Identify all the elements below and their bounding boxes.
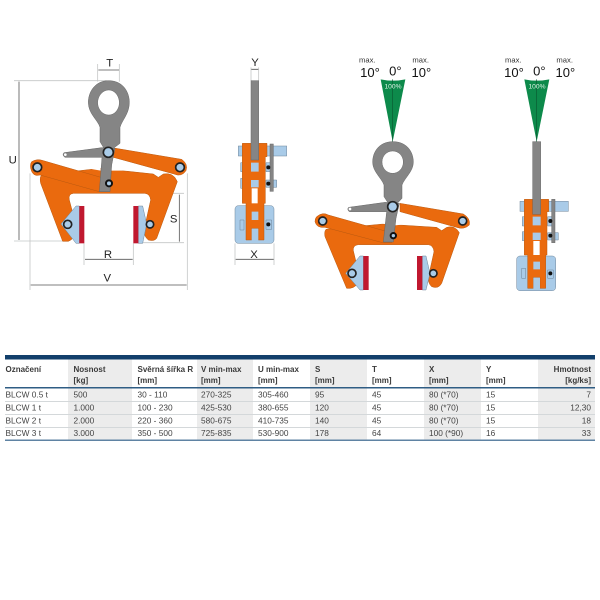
openings [533, 217, 541, 288]
row BLCW 1 t: 100 - 230 [138, 402, 173, 412]
gray bar [251, 81, 259, 160]
row BLCW 0.5 t: BLCW 0.5 t [6, 390, 49, 400]
row BLCW 1 t: 15 [486, 402, 496, 412]
row BLCW 3 t: 530-900 [258, 428, 289, 438]
row BLCW 1 t [6, 402, 591, 412]
row BLCW 3 t: 100 (*90) [429, 428, 463, 438]
text: 10 left: 10° [504, 65, 524, 80]
text: 10 right: 10° [412, 65, 431, 80]
row BLCW 2 t: 220 - 360 [138, 416, 173, 426]
row BLCW 3 t: 16 [486, 428, 496, 438]
dimension label R: R [104, 249, 112, 261]
dimension label T: T [106, 58, 113, 70]
table header: [mm] [201, 376, 221, 385]
row BLCW 2 t: 45 [372, 416, 382, 426]
dimension lines [235, 67, 274, 265]
row BLCW 0.5 t: 270-325 [201, 390, 232, 400]
row BLCW 2 t: 18 [582, 416, 591, 426]
row BLCW 0.5 t: 7 [586, 390, 591, 400]
row BLCW 0.5 t: 45 [372, 390, 382, 400]
orange plates [524, 199, 549, 288]
row BLCW 0.5 t: 95 [315, 390, 325, 400]
table header: S [315, 365, 321, 374]
table header: X [429, 365, 435, 374]
dimension label Y: Y [251, 57, 259, 69]
outer side plates [240, 163, 277, 230]
text: max right: max. [412, 55, 429, 64]
row BLCW 3 t: 33 [582, 428, 591, 438]
row BLCW 1 t: 120 [315, 402, 329, 412]
text: 10 left: 10° [360, 65, 380, 80]
table header: [kg] [74, 376, 88, 385]
orange jaw body [325, 224, 459, 288]
row BLCW 1 t: 1.000 [74, 402, 95, 412]
right clamp pad [133, 206, 154, 243]
row BLCW 1 t: BLCW 1 t [6, 402, 42, 412]
openings [251, 163, 259, 240]
gray arm [63, 148, 115, 192]
row BLCW 1 t: 12,30 [570, 402, 591, 412]
row separators [5, 402, 595, 428]
row BLCW 0.5 t: 305-460 [258, 390, 289, 400]
bolt [520, 201, 568, 211]
pivots [319, 202, 467, 238]
green angle wedge: 100% [384, 83, 402, 90]
white gaps [68, 155, 148, 171]
bolt heads [548, 219, 552, 275]
table header: Označení [6, 365, 42, 374]
row BLCW 3 t: 350 - 500 [138, 428, 173, 438]
dimension label U: U [9, 155, 17, 167]
text: 10 right: 10° [556, 65, 575, 80]
row BLCW 2 t: 2.000 [74, 416, 95, 426]
green angle wedge [524, 79, 549, 142]
right clamp pad [417, 256, 437, 290]
row BLCW 2 t [6, 416, 591, 426]
table header: [mm] [429, 376, 449, 385]
dimension lines [14, 64, 187, 290]
row BLCW 2 t: BLCW 2 t [6, 416, 42, 426]
blue jaw pad block [235, 206, 274, 243]
orange plates [242, 143, 267, 240]
row BLCW 1 t: 45 [372, 402, 382, 412]
table header: Hmotnost [554, 365, 591, 374]
row BLCW 0.5 t [6, 390, 591, 400]
white gaps [353, 213, 431, 225]
header rule [5, 387, 595, 388]
dimension label X: X [250, 249, 258, 261]
orange front lever [30, 160, 110, 192]
gray link [270, 144, 273, 191]
text: max left: max. [359, 55, 376, 64]
table header: T [372, 365, 377, 374]
table header: [mm] [372, 376, 392, 385]
blue jaw pad block [517, 256, 556, 291]
table header: [mm] [315, 376, 335, 385]
dimension label S: S [170, 214, 178, 226]
table header: Nosnost [74, 365, 106, 374]
left clamp pad [346, 256, 369, 290]
text: max left: max. [505, 55, 522, 64]
pivots [33, 147, 184, 186]
green angle wedge: 100% [528, 83, 546, 90]
gray lifting eye [373, 142, 413, 203]
bolts heads [266, 165, 270, 226]
table header: Svěrná šířka R [138, 365, 193, 374]
table header: V min-max [201, 365, 242, 374]
orange rear lever [400, 203, 470, 228]
gray bar [533, 142, 541, 214]
row BLCW 1 t: 425-530 [201, 402, 232, 412]
table header: [mm] [258, 376, 278, 385]
left clamp pad [61, 206, 84, 243]
bottom rule [5, 440, 595, 441]
gray link [552, 199, 555, 243]
table header: [mm] [138, 376, 157, 385]
text: 0 center: 0° [533, 64, 546, 79]
gray lifting eye [88, 81, 129, 148]
table header: [kg/ks] [565, 376, 591, 385]
row BLCW 2 t: 15 [486, 416, 496, 426]
dimension label V: V [104, 272, 112, 284]
orange jaw body [40, 168, 177, 241]
tilted angle clamp front view [315, 55, 470, 290]
row BLCW 3 t: 725-835 [201, 428, 232, 438]
row BLCW 3 t: 64 [372, 428, 382, 438]
row BLCW 2 t: 580-675 [201, 416, 232, 426]
bolt [238, 146, 287, 156]
row BLCW 3 t: 178 [315, 428, 329, 438]
row BLCW 0.5 t: 500 [74, 390, 88, 400]
specification table [5, 355, 595, 441]
gray arm [348, 202, 399, 242]
table header: U min-max [258, 365, 299, 374]
row BLCW 3 t: 3.000 [74, 428, 95, 438]
text: 0 center: 0° [389, 64, 402, 79]
orange rear lever [106, 147, 187, 175]
side view clamp with dimensions [235, 57, 287, 265]
row BLCW 2 t: 80 (*70) [429, 416, 459, 426]
table top bar [5, 355, 595, 360]
tilted angle clamp side view [504, 55, 575, 291]
row BLCW 2 t: 140 [315, 416, 329, 426]
front view clamp with dimensions [9, 58, 187, 290]
table column shading [68, 359, 595, 440]
row BLCW 2 t: 410-735 [258, 416, 289, 426]
row BLCW 0.5 t: 30 - 110 [138, 390, 168, 400]
orange front lever [315, 214, 393, 243]
row BLCW 3 t: BLCW 3 t [6, 428, 42, 438]
row BLCW 1 t: 380-655 [258, 402, 289, 412]
green angle wedge [381, 79, 405, 142]
text: max right: max. [556, 55, 573, 64]
row BLCW 3 t [6, 428, 591, 438]
row BLCW 0.5 t: 15 [486, 390, 496, 400]
row BLCW 0.5 t: 80 (*70) [429, 390, 459, 400]
row BLCW 1 t: 80 (*70) [429, 402, 459, 412]
outer side plates [522, 217, 558, 278]
table header [6, 365, 591, 385]
table header: [mm] [486, 376, 506, 385]
table header: Y [486, 365, 492, 374]
